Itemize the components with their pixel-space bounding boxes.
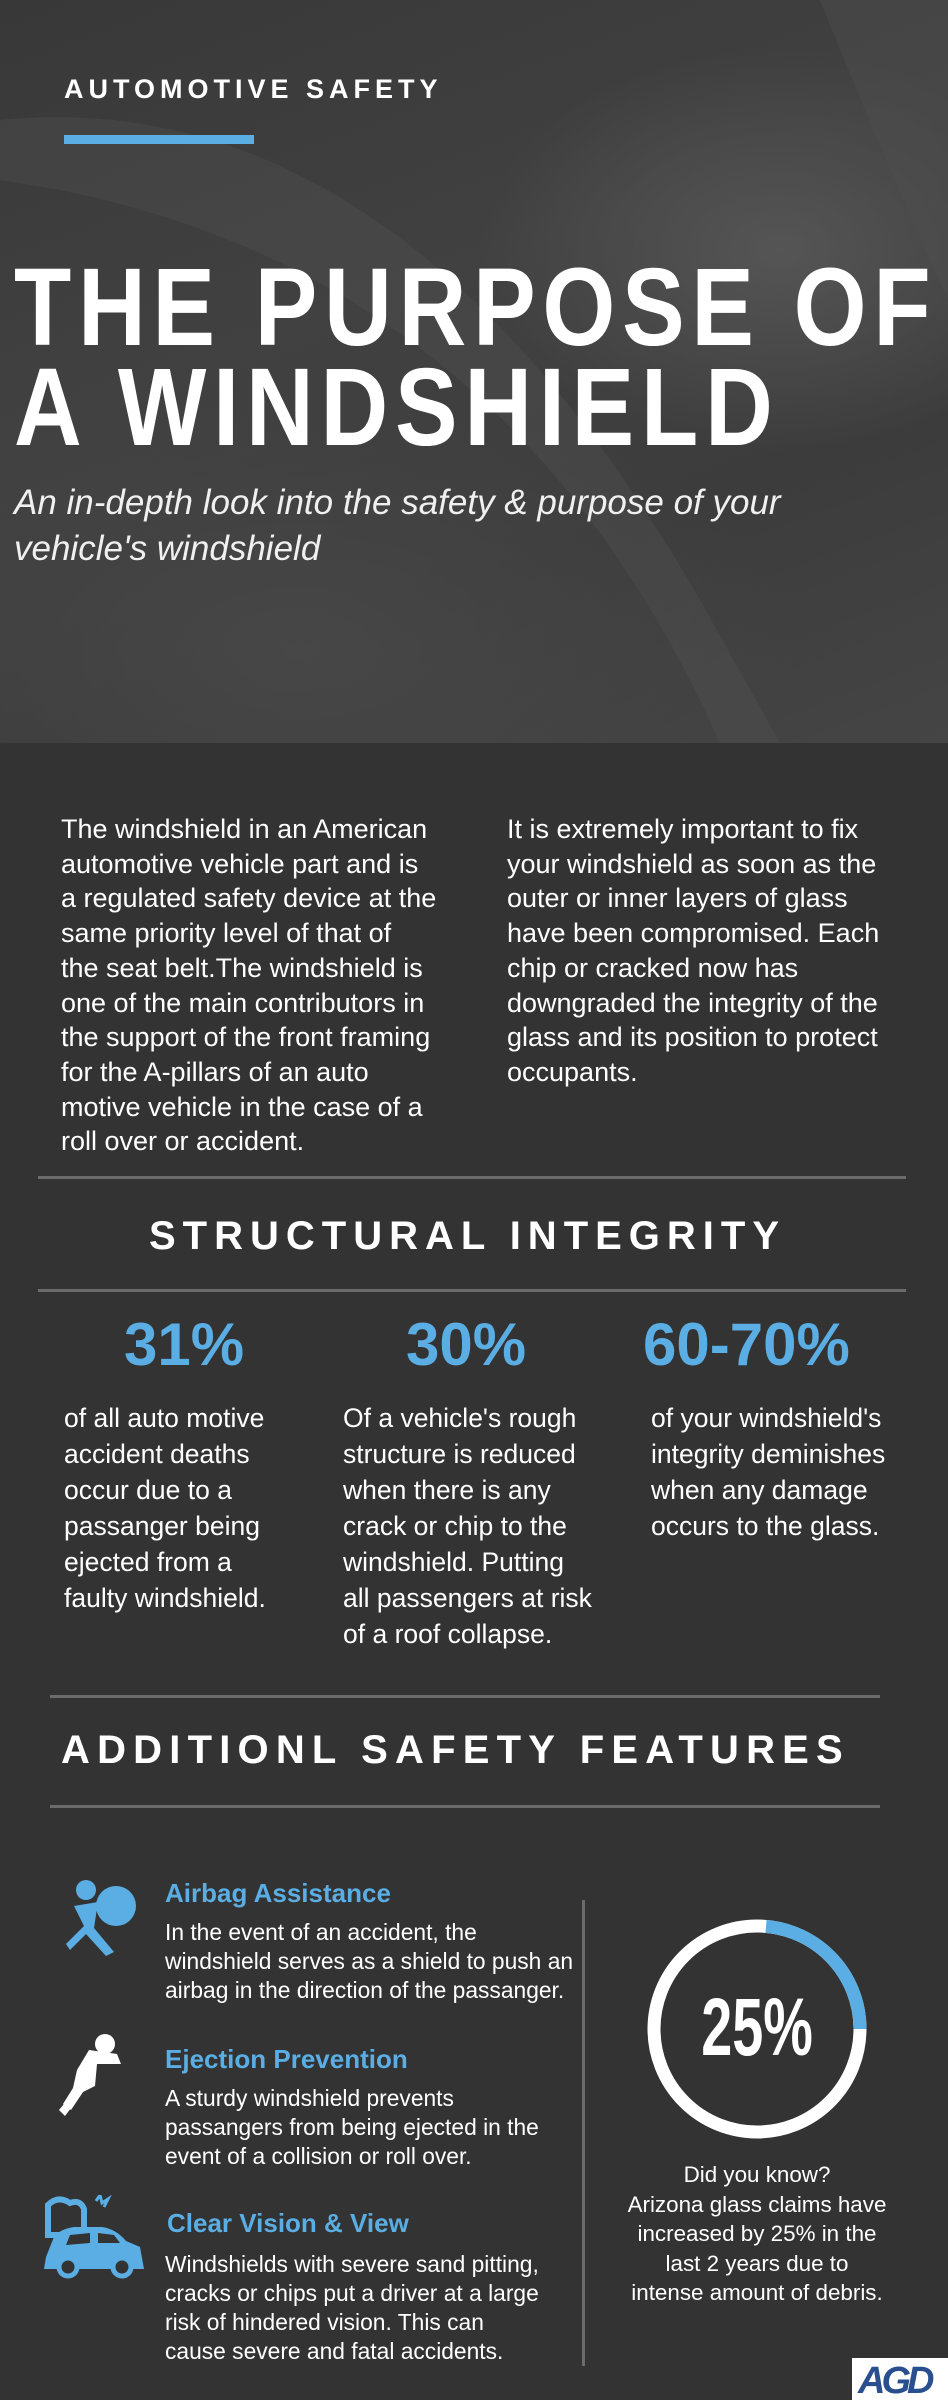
stat: 30%: Of a vehicle's rough (343, 1403, 576, 1433)
feature: ejection prevention: Ejection Prevention (165, 2044, 408, 2074)
stat: 31%: occur due to a (64, 1475, 232, 1505)
stat: 31%: ejected from a (64, 1547, 232, 1577)
intro paragraph left: the support of the front framing (61, 1022, 430, 1052)
callout: did you know: last 2 years due to (666, 2250, 848, 2276)
subtitle (12, 483, 782, 568)
feature: ejection prevention: passangers from being ejected in the (165, 2114, 539, 2140)
hero background (0, 0, 948, 743)
callout: did you know: intense amount of debris. (631, 2280, 883, 2305)
feature: airbag assistance (66, 1878, 573, 2003)
donut chart: 25%: 25% (701, 1982, 813, 2073)
stat: 60-70% (643, 1311, 885, 1541)
intro paragraph right: have been compromised. Each (507, 918, 879, 948)
feature: airbag assistance: In the event of an accident, the (165, 1919, 477, 1945)
callout: did you know: increased by 25% in the (638, 2221, 876, 2246)
feature: clear vision & view: cracks or chips put a driver at a large (165, 2280, 539, 2306)
intro paragraph right: your windshield as soon as the (507, 849, 876, 879)
stat: 30%: when there is any (343, 1475, 551, 1505)
heading: additional safety features: ADDITIONL SAFETY FEATURES (61, 1728, 850, 1772)
stat: 30%: of a roof collapse. (343, 1619, 552, 1649)
intro paragraph right: It is extremely important to fix (507, 814, 858, 844)
feature: clear vision & view: Clear Vision & View (167, 2208, 409, 2238)
callout: did you know (628, 2162, 886, 2305)
stat: 31%: faulty windshield. (64, 1583, 266, 1613)
stat: 31%: passanger being (64, 1511, 260, 1541)
icon: airbag (66, 1880, 136, 1956)
stat: 31%: of all auto motive (64, 1403, 264, 1433)
feature: ejection prevention: A sturdy windshield prevents (165, 2085, 454, 2111)
stat: 60-70%: 60-70% (643, 1311, 850, 1378)
donut chart: 25% (648, 1920, 866, 2138)
stat: 60-70%: occurs to the glass. (651, 1511, 879, 1541)
stat: 30%: windshield. Putting (343, 1547, 564, 1577)
stat: 31% (64, 1311, 266, 1613)
heading: structural integrity: STRUCTURAL INTEGRITY (149, 1214, 786, 1258)
title (14, 246, 937, 469)
intro paragraph left: the seat belt.The windshield is (61, 953, 423, 983)
stat: 60-70%: integrity deminishes (651, 1439, 885, 1469)
intro paragraph left: motive vehicle in the case of a (61, 1092, 423, 1122)
label: automotive safety: AUTOMOTIVE SAFETY (64, 74, 443, 104)
intro paragraph left: roll over or accident. (61, 1126, 304, 1156)
intro paragraph left: automotive vehicle part and is (61, 849, 418, 879)
callout: did you know: Did you know? (684, 2162, 830, 2187)
callout: did you know: Arizona glass claims have (628, 2192, 886, 2216)
feature: airbag assistance: airbag in the direction of the passanger. (165, 1977, 564, 2003)
intro paragraph right: downgraded the integrity of the (507, 988, 878, 1018)
stat: 31%: accident deaths (64, 1439, 250, 1469)
feature: clear vision & view: cause severe and fatal accidents. (165, 2338, 503, 2364)
stat: 30%: 30% (406, 1311, 526, 1378)
intro paragraph left: The windshield in an American (61, 814, 427, 844)
subtitle: An in-depth look into the safety & purpose of your (14, 483, 781, 522)
icon: ejection (59, 2034, 121, 2116)
title: THE PURPOSE OF (14, 246, 937, 369)
intro paragraph right: outer or inner layers of glass (507, 883, 848, 913)
intro paragraph left: same priority level of that of (61, 918, 391, 948)
stat: 60-70%: when any damage (651, 1475, 868, 1505)
stat: 60-70%: of your windshield's (651, 1403, 881, 1433)
stat: 30%: all passengers at risk (343, 1583, 592, 1613)
stat: 31%: 31% (124, 1311, 244, 1378)
feature: clear vision & view (44, 2195, 539, 2364)
feature: ejection prevention: event of a collision or roll over. (165, 2143, 472, 2169)
intro paragraph left: for the A-pillars of an auto (61, 1057, 369, 1087)
stat: 30%: crack or chip to the (343, 1511, 567, 1541)
stat: 30% (343, 1311, 592, 1649)
blue accent bar (64, 135, 254, 144)
stat: 30%: structure is reduced (343, 1439, 576, 1469)
subtitle: vehicle's windshield (14, 529, 320, 568)
intro paragraph right: glass and its position to protect (507, 1022, 878, 1052)
intro paragraph left: one of the main contributors in (61, 988, 424, 1018)
intro paragraph right (507, 814, 879, 1087)
feature: clear vision & view: Windshields with severe sand pitting, (165, 2251, 539, 2277)
intro paragraph right: occupants. (507, 1057, 638, 1087)
intro paragraph left: a regulated safety device at the (61, 883, 436, 913)
title: A WINDSHIELD (14, 346, 780, 469)
intro paragraph left (61, 814, 436, 1156)
intro paragraph right: chip or cracked now has (507, 953, 798, 983)
icon: car (44, 2195, 144, 2278)
feature: airbag assistance: Airbag Assistance (165, 1878, 391, 1908)
feature: ejection prevention (59, 2034, 539, 2169)
vertical divider (582, 1900, 585, 2366)
feature: airbag assistance: windshield serves as a shield to push an (165, 1948, 573, 1974)
feature: clear vision & view: risk of hindered vision. This can (165, 2309, 484, 2335)
